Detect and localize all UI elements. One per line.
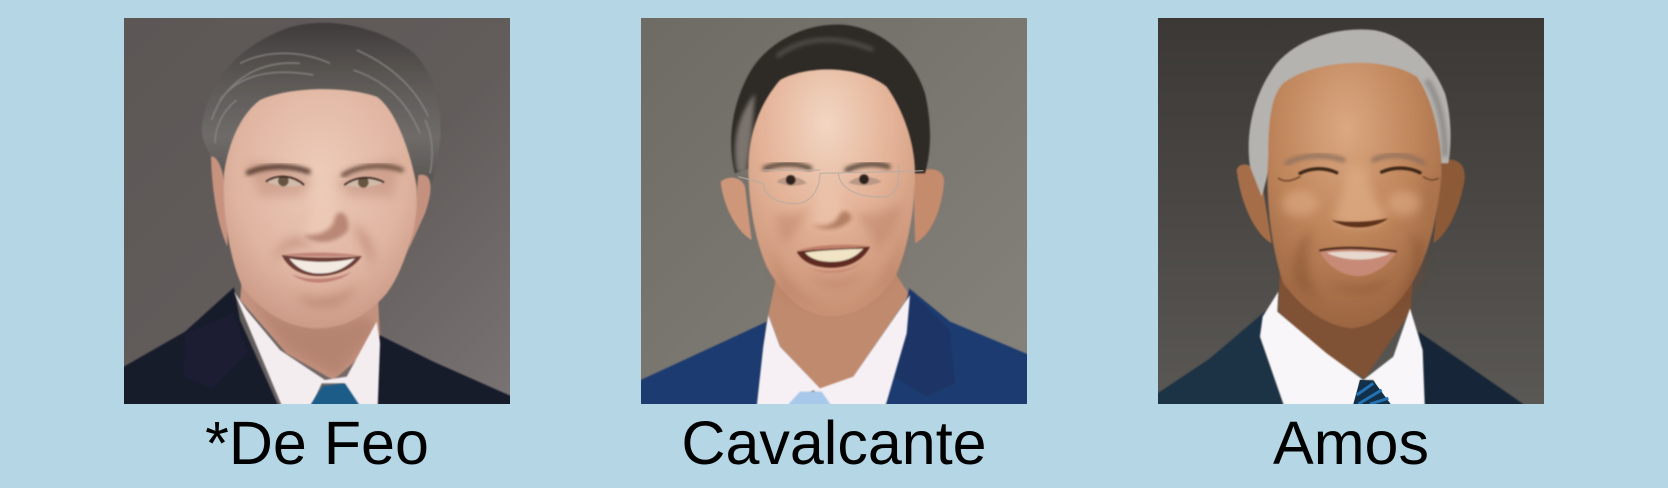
hair — [1249, 29, 1451, 197]
shirt collar — [234, 292, 380, 413]
brows — [248, 166, 402, 175]
hair shadow — [1427, 80, 1445, 157]
right ear — [1433, 159, 1465, 243]
studio backdrop — [641, 18, 1027, 404]
panel: De Feo portrait card — [124, 18, 1418, 477]
necktie — [1353, 380, 1391, 404]
portrait: Cavalcante — [641, 18, 1417, 404]
mouth — [1319, 248, 1397, 276]
nose — [302, 180, 349, 242]
shirt collar — [756, 295, 910, 413]
nose — [1332, 167, 1388, 227]
neck — [768, 260, 909, 390]
face — [748, 69, 915, 317]
hair — [731, 25, 930, 173]
facial shading — [247, 160, 400, 307]
hair sheen — [777, 40, 873, 57]
panel: Cavalcante portrait card — [641, 18, 1417, 477]
left ear — [1237, 164, 1272, 243]
mouth — [797, 245, 870, 273]
eyes — [777, 174, 882, 186]
face — [224, 89, 417, 328]
name label: De Feo: *De Feo — [205, 409, 429, 477]
suit jacket — [113, 287, 520, 413]
brows — [765, 164, 888, 170]
glasses — [738, 165, 923, 204]
eyes — [266, 176, 384, 188]
nose — [811, 182, 852, 229]
studio backdrop — [1158, 18, 1544, 404]
studio backdrop — [124, 18, 510, 404]
hair strands — [212, 50, 432, 173]
cheek highlights — [1282, 190, 1420, 217]
neck — [1278, 267, 1413, 378]
left ear — [721, 178, 752, 240]
neck — [240, 267, 380, 380]
right ear — [913, 169, 944, 243]
shirt collar — [1260, 292, 1425, 413]
eyes — [1278, 168, 1438, 181]
temple grey — [735, 93, 755, 173]
name label: Amos: Amos — [1273, 409, 1429, 477]
suit jacket — [1150, 310, 1537, 413]
brows — [1287, 155, 1423, 163]
neck shadow — [247, 293, 377, 377]
hair — [202, 23, 441, 213]
left ear — [211, 157, 228, 247]
portrait: Amos — [1158, 18, 1544, 404]
face — [1267, 63, 1442, 328]
panel: Amos portrait card — [1158, 18, 1544, 477]
name label: Cavalcante: Cavalcante — [681, 409, 987, 477]
mouth — [282, 253, 362, 283]
necktie — [305, 383, 365, 413]
facial shading — [767, 200, 907, 310]
suit jacket — [633, 288, 1040, 413]
right ear — [408, 175, 431, 250]
facial shading — [1294, 167, 1428, 317]
portrait: De Feo — [124, 18, 1418, 404]
necktie — [780, 392, 837, 413]
